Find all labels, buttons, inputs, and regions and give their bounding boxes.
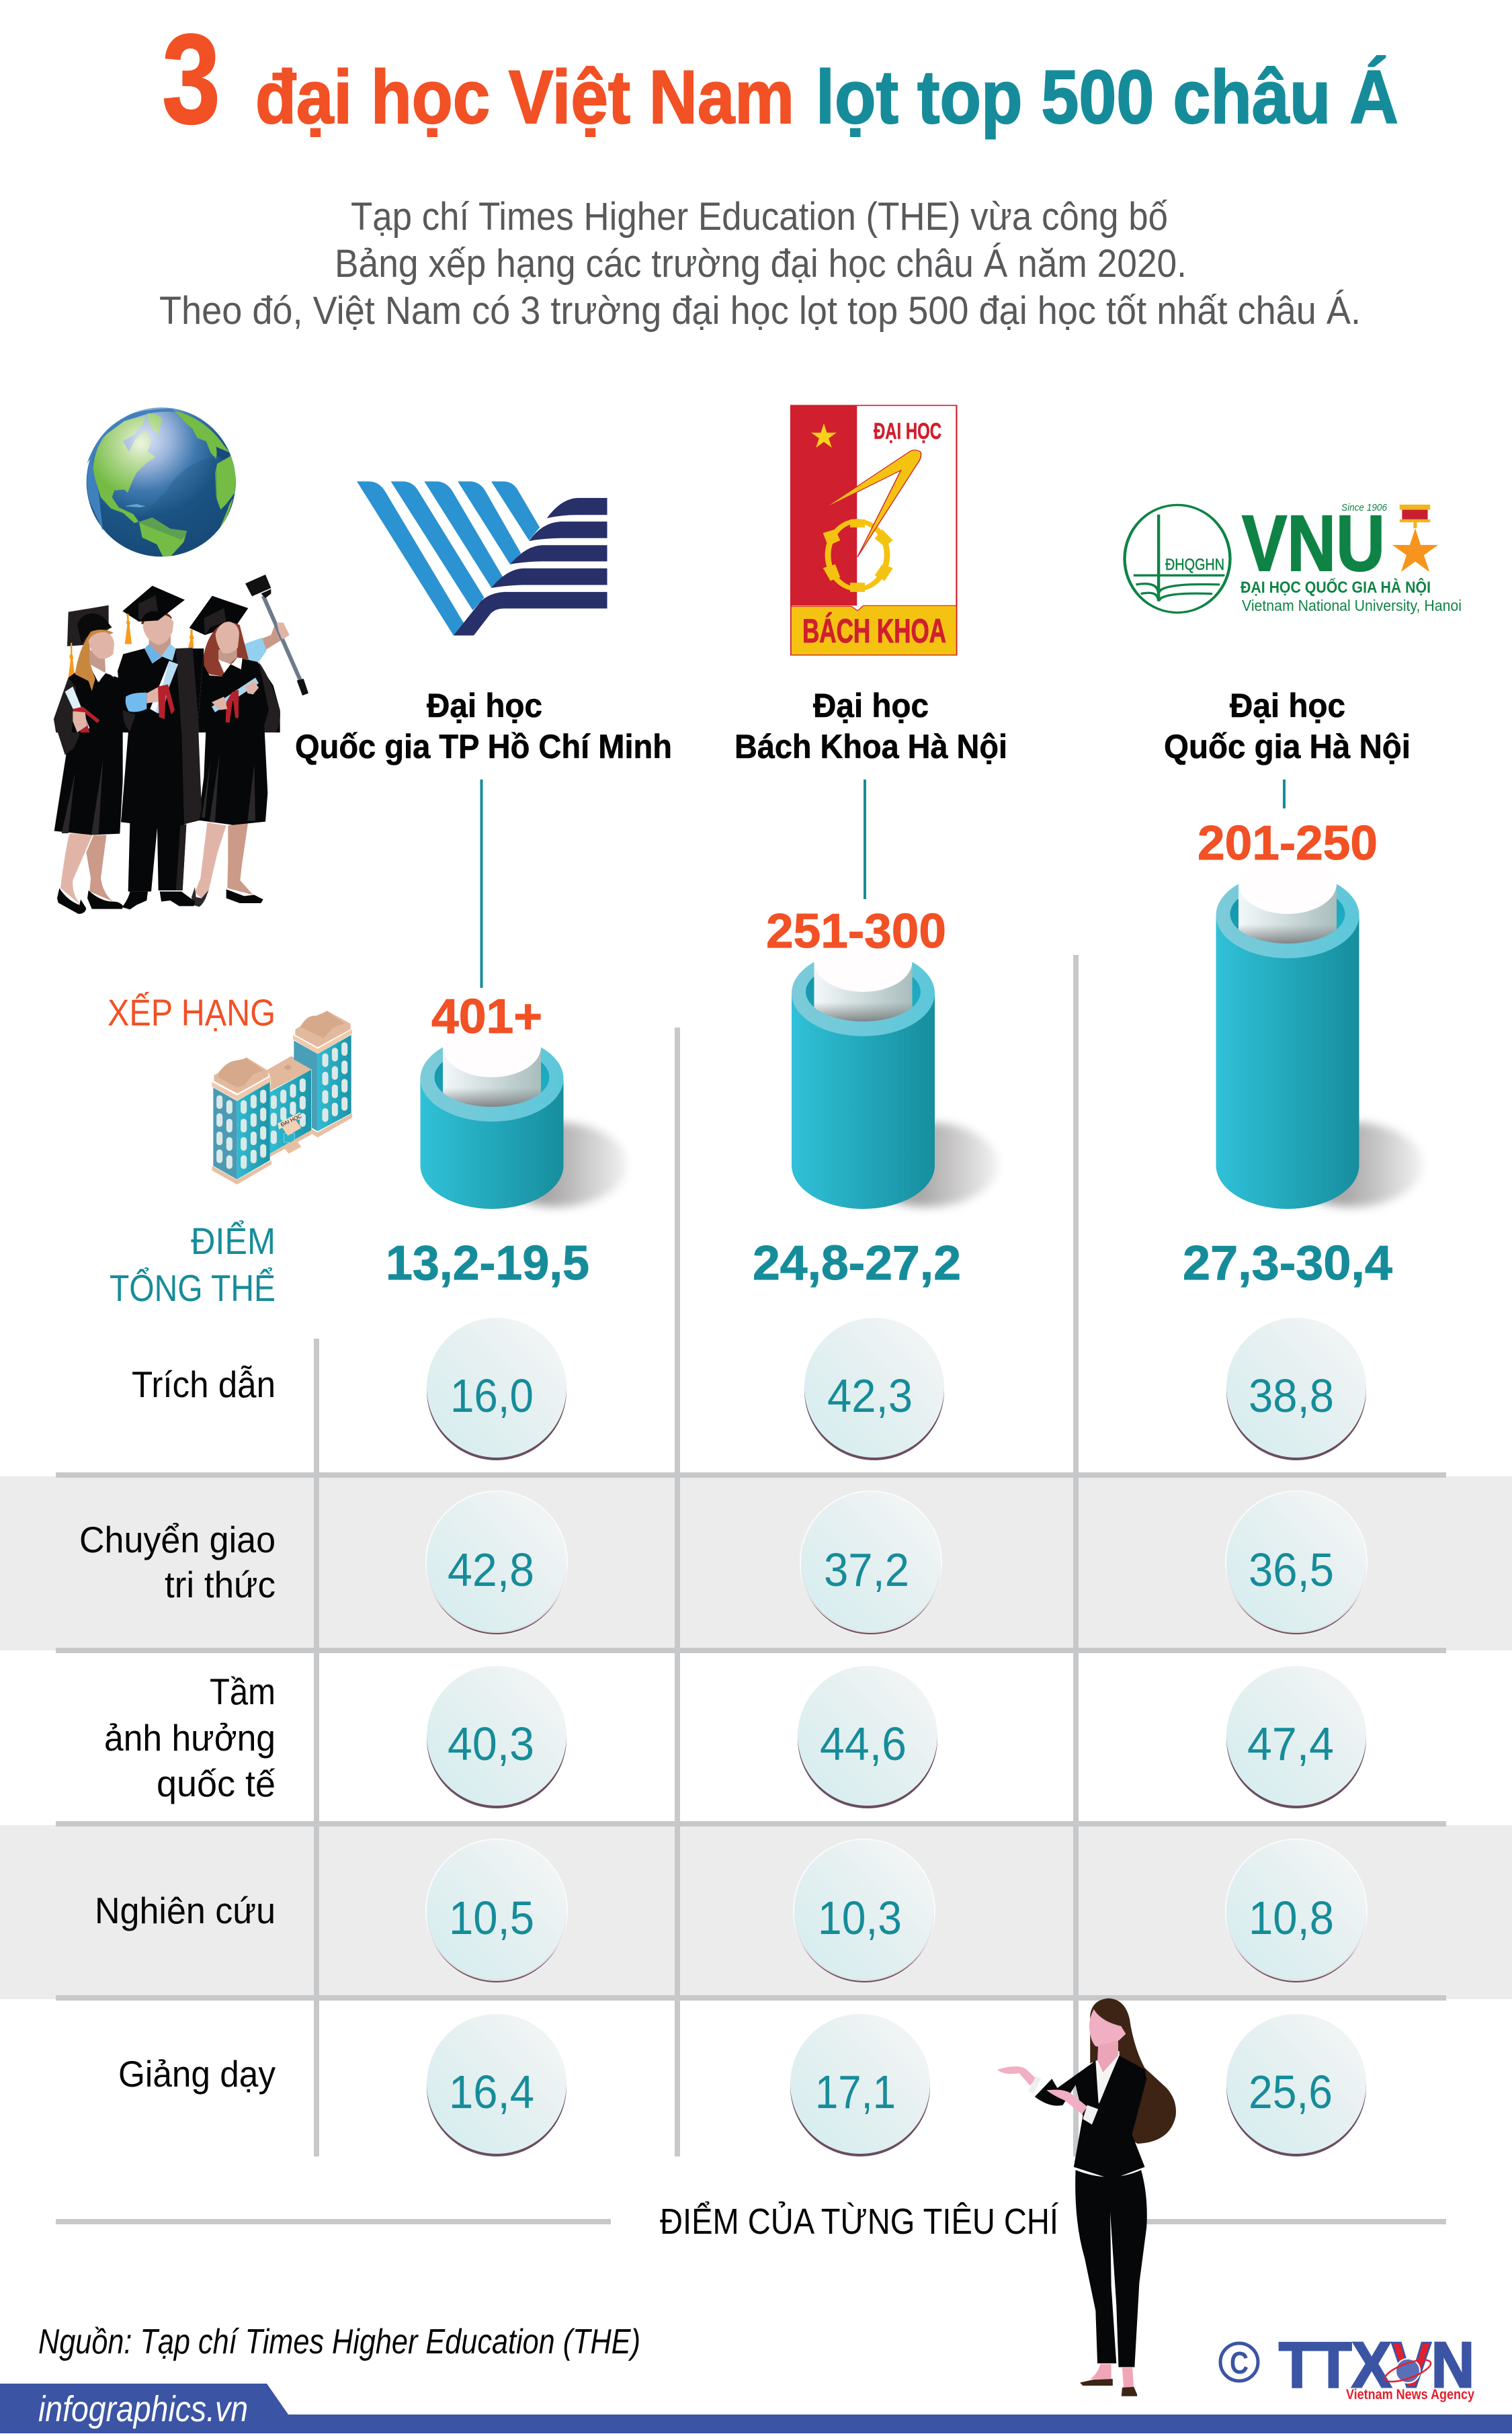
score circle: 38,8 [1226,1318,1366,1460]
icon: presenter woman [997,1999,1176,2396]
logo: Bách Khoa Hà Nội: BÁCH KHOA [802,612,946,650]
row label: Tầm ảnh hưởng quốc tế: ảnh hưởng [104,1717,276,1759]
score circle: 37,2: 37,2 [824,1544,909,1596]
left student, skirt and legs [54,726,123,914]
label: điểm tổng thể: TỔNG THỂ [110,1267,276,1309]
cylinder: Bách Khoa Hà Nội [792,931,998,1209]
logo: TTXVN: Vietnam News Agency [1346,2387,1474,2402]
university name: ĐHQG TP HCM: Quốc gia TP Hồ Chí Minh [295,728,672,765]
university name: Bách Khoa Hà Nội: Đại học [813,687,929,724]
centre student, lower body [121,726,202,909]
cylinder: ĐHQG Hà Nội [1216,853,1423,1209]
centre student, upper body [118,586,204,732]
score circle: 10,8 [1225,1839,1368,1982]
intro text: Bảng xếp hạng các trường đại học châu Á năm 2020. [335,242,1187,286]
university name: ĐHQG Hà Nội: Quốc gia Hà Nội [1164,728,1411,765]
logo: Đại học Quốc gia Hà Nội: ĐẠI HỌC QUỐC GIA HÀ NỘI [1241,578,1431,597]
score circle: 17,1: 17,1 [815,2066,896,2118]
intro text [159,195,1361,333]
right student, upper body [188,575,308,732]
score circle: 42,8: 42,8 [448,1544,534,1596]
logo: Đại học Quốc gia Hà Nội: Vietnam National University, Hanoi [1242,597,1462,614]
label: điểm tổng thể: ĐIỂM [191,1220,276,1262]
logo: Đại học Quốc gia Hà Nội: VNU [1242,499,1385,588]
icon: globe [87,407,236,558]
left student, upper body [54,605,123,732]
score circle: 10,5 [425,1839,568,1982]
score circle: 17,1 [790,2014,930,2156]
intro text: Tạp chí Times Higher Education (THE) vừa công bố [351,195,1168,239]
score circle: 16,4: 16,4 [449,2066,534,2118]
copyright symbol [1220,2343,1258,2381]
row band: Nghiên cứu [0,1825,1512,1999]
icon: university building [212,1011,352,1185]
score circle: 40,3 [427,1666,566,1808]
score circle: 42,3: 42,3 [827,1370,913,1422]
icon: graduates taking a selfie [54,575,308,914]
row label: Chuyển giao tri thức [79,1519,276,1605]
logo: Đại học Quốc gia Hà Nội [1125,499,1462,614]
title [162,8,1398,151]
score circle: 16,0: 16,0 [450,1370,534,1422]
intro text: Theo đó, Việt Nam có 3 trường đại học lọt top 500 đại học tốt nhất châu Á. [159,289,1361,333]
score circle: 38,8: 38,8 [1249,1370,1334,1422]
score circle: 16,4 [427,2014,566,2156]
score circle: 10,3 [793,1839,935,1982]
score circle: 25,6 [1226,2014,1366,2156]
university name: ĐHQG Hà Nội: Đại học [1230,687,1345,724]
row label: Chuyển giao tri thức: Chuyển giao [79,1519,276,1560]
copyright symbol: C [1230,2345,1249,2380]
score circle: 47,4 [1226,1666,1366,1808]
row label: Tầm ảnh hưởng quốc tế: quốc tế [157,1763,276,1804]
title: 3 [162,8,220,151]
row label: Tầm ảnh hưởng quốc tế: Tầm [210,1671,276,1712]
score circle: 40,3: 40,3 [448,1718,534,1770]
row label: Trích dẫn: Trích dẫn [132,1363,276,1405]
score circle: 36,5 [1225,1491,1368,1634]
overall score: 13,2-19,5: 13,2-19,5 [386,1236,589,1290]
logo: Bách Khoa Hà Nội: ĐẠI HỌC [874,419,941,444]
logo: Bách Khoa Hà Nội [791,405,956,655]
university name: Bách Khoa Hà Nội: Bách Khoa Hà Nội [734,728,1007,765]
score circle: 42,8 [425,1491,568,1634]
title: đại học Việt Nam [255,55,794,139]
overall score: 24,8-27,2: 24,8-27,2 [753,1236,961,1290]
row label: Chuyển giao tri thức: tri thức [165,1564,276,1605]
label: điểm tổng thể [110,1220,276,1309]
overall score: 27,3-30,4: 27,3-30,4 [1183,1236,1392,1290]
title: lọt top 500 châu Á [816,55,1398,139]
row band: Chuyển giao tri thức [0,1476,1512,1650]
score circle: 10,3: 10,3 [818,1892,902,1944]
score circle: 10,5: 10,5 [449,1892,534,1944]
score circle: 10,8: 10,8 [1249,1892,1334,1944]
score circle: 42,3 [804,1318,944,1460]
score circle: 25,6: 25,6 [1249,2066,1333,2118]
score circle: 47,4: 47,4 [1247,1718,1334,1770]
university name: ĐHQG Hà Nội [1164,687,1411,765]
rank: 251-300: 251-300 [766,905,946,958]
cylinder: ĐHQG TP HCM [421,1017,627,1209]
rank: 201-250: 201-250 [1198,816,1378,870]
logo: TTXVN: TTXVN [1279,2329,1474,2401]
source: Nguồn: Tạp chí Times Higher Education (THE) [38,2322,640,2361]
icon: university building: ĐẠI HỌC [280,1113,303,1128]
university name: ĐHQG TP HCM [295,687,672,765]
logo: Đại học Quốc gia Hà Nội: Since 1906 [1341,502,1388,513]
connector lines [480,780,1286,988]
caption: điểm của từng tiêu chí: ĐIỂM CỦA TỪNG TIÊU CHÍ [660,2201,1058,2242]
row label: Tầm ảnh hưởng quốc tế [104,1671,276,1804]
score circle: 36,5: 36,5 [1249,1544,1334,1596]
university name: Bách Khoa Hà Nội [734,687,1007,765]
score circle: 16,0 [427,1318,566,1460]
score circle: 44,6: 44,6 [820,1718,907,1770]
label: xếp hạng: XẾP HẠNG [108,991,276,1034]
logo: Đại học Quốc gia Hà Nội: ĐHQGHN [1165,556,1224,574]
university name: ĐHQG TP HCM: Đại học [427,687,542,724]
footer site name: infographics.vn [38,2389,248,2429]
row label: Giảng dạy: Giảng dạy [118,2053,276,2095]
right student, skirt and legs [192,726,267,907]
score circle: 44,6 [798,1666,937,1808]
logo: Đại học Quốc gia TP Hồ Chí Minh [357,481,607,636]
score circle: 37,2 [800,1491,942,1634]
row label: Nghiên cứu: Nghiên cứu [95,1890,276,1931]
rank: 401+: 401+ [431,990,542,1044]
footer bar [0,2384,1512,2433]
